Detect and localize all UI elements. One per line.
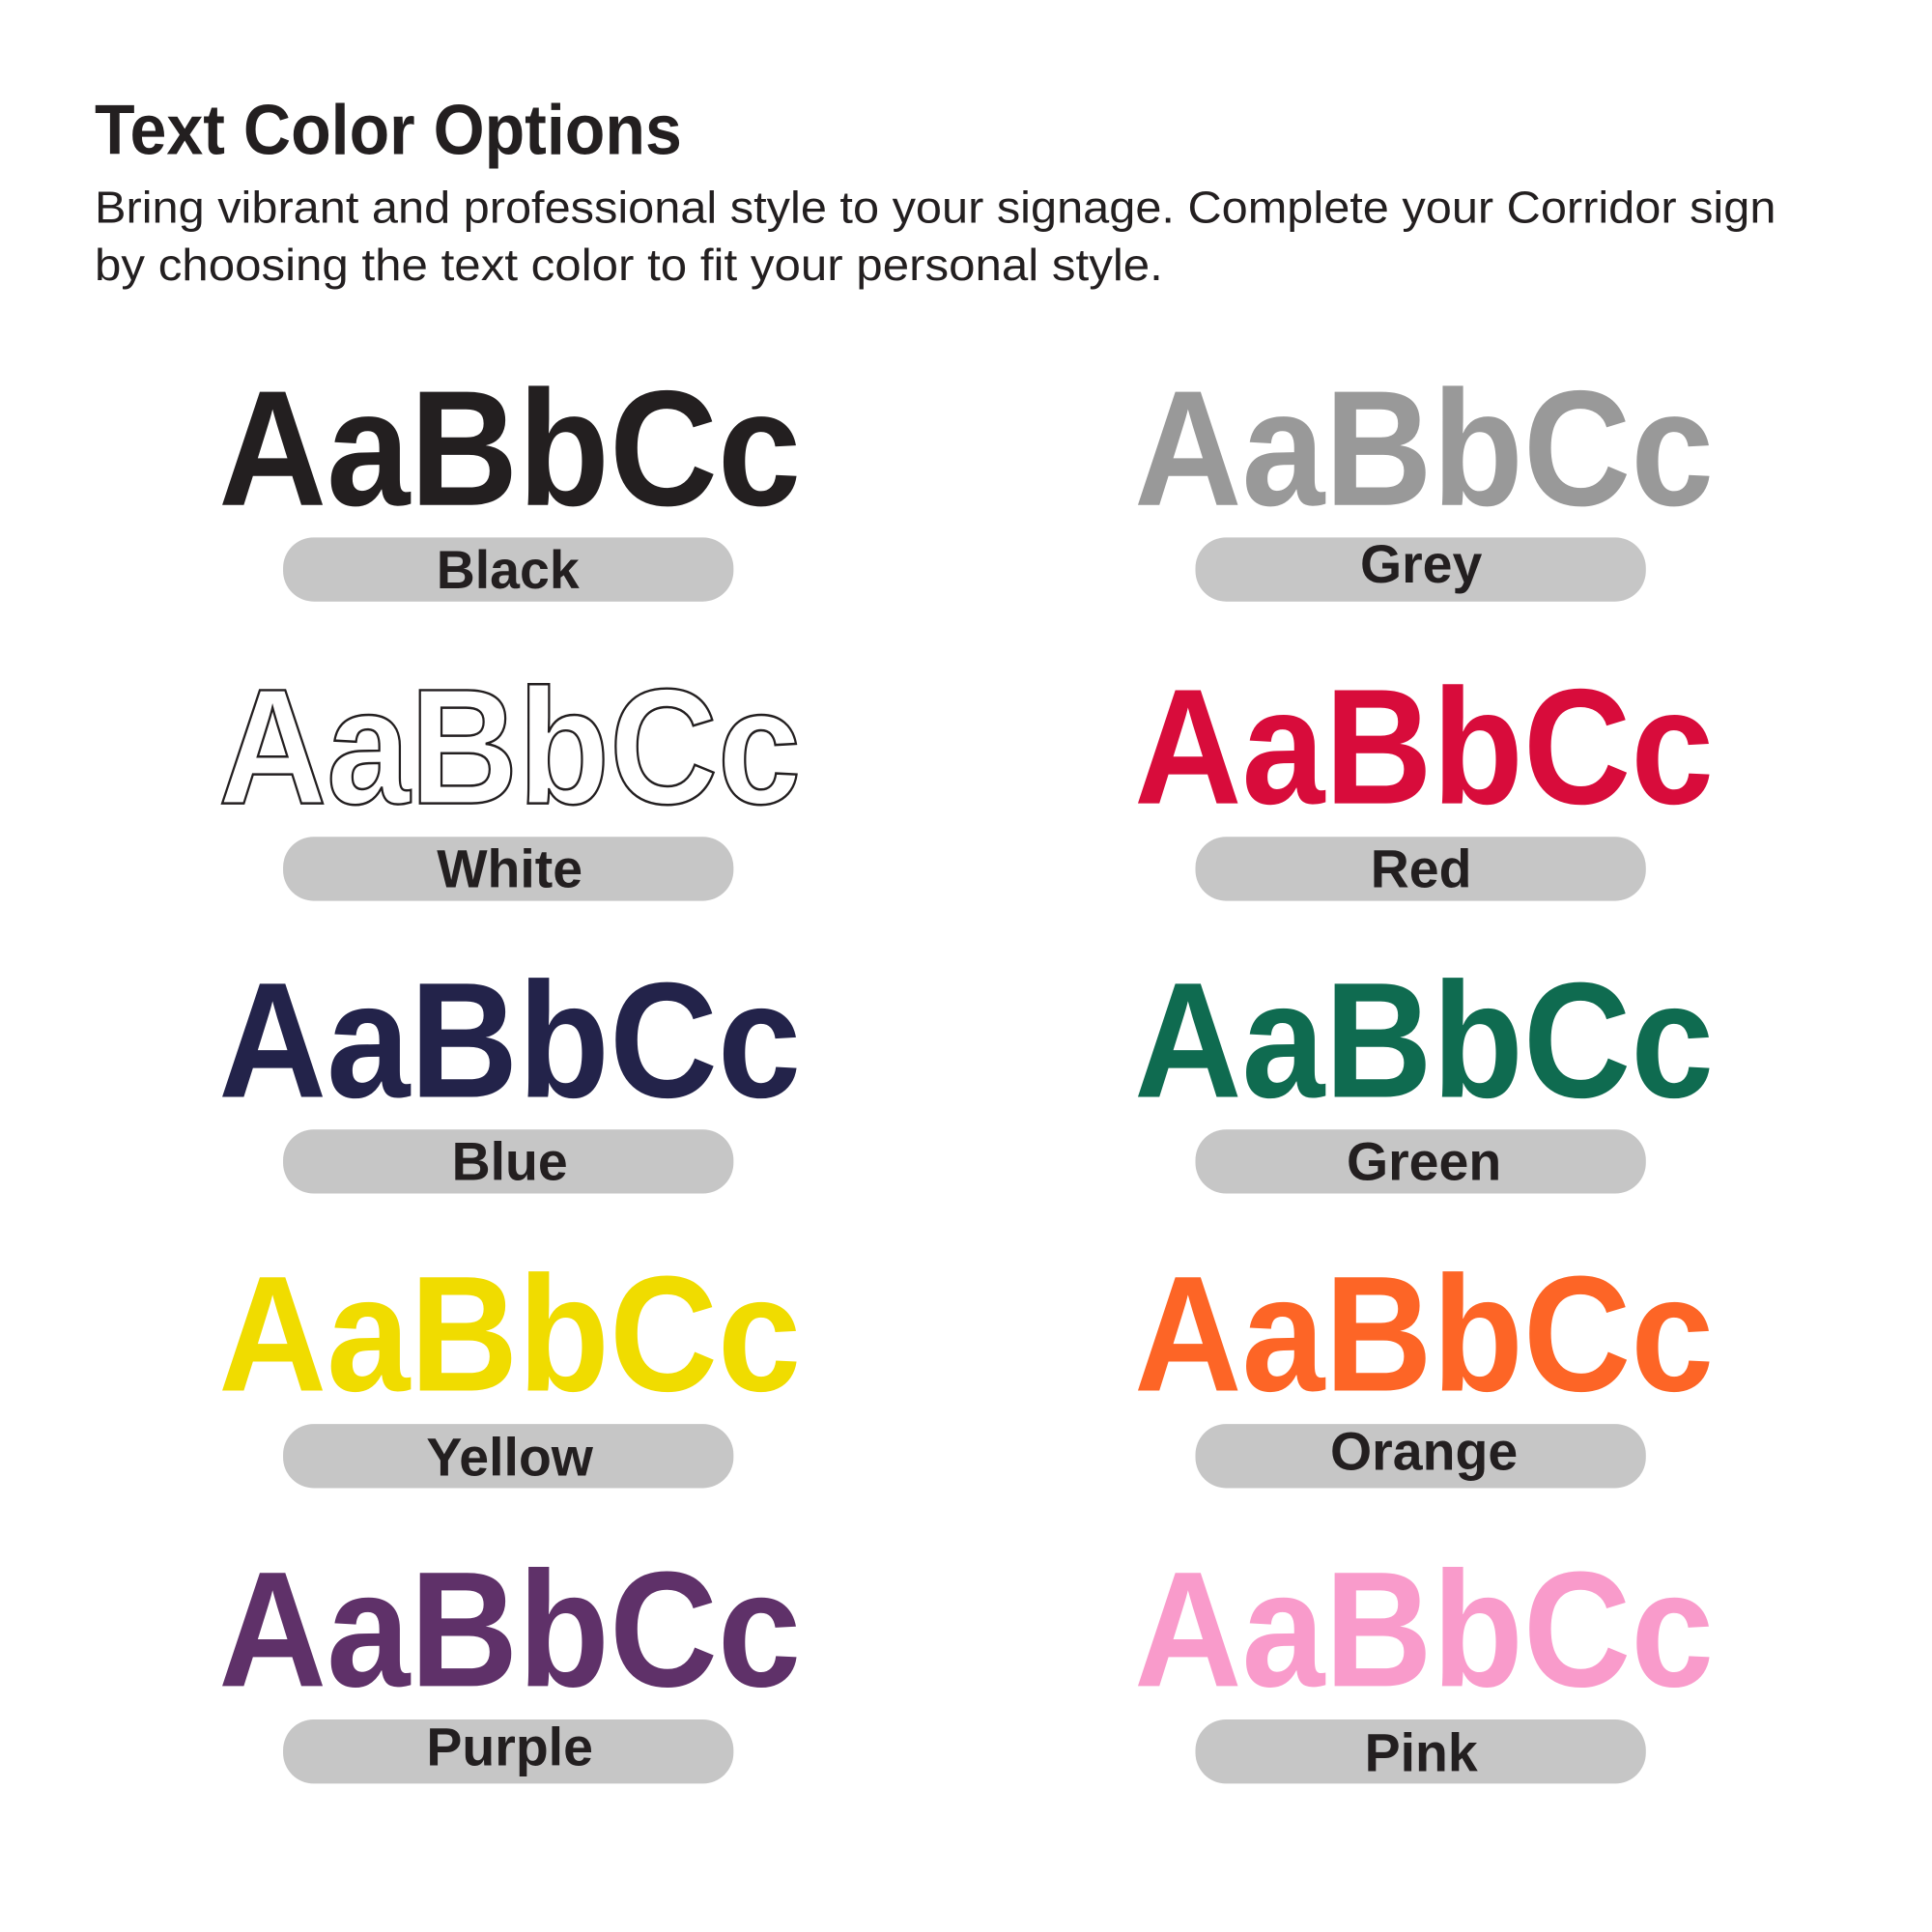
swatch: White: AaBbCc [218, 656, 801, 839]
swatch: Yellow: Yellow [426, 1428, 594, 1488]
swatch: Yellow [218, 1242, 801, 1488]
swatch: Grey: Grey [1360, 534, 1482, 594]
swatch: Blue: AaBbCc [218, 950, 801, 1133]
swatch: Green: AaBbCc [1134, 950, 1714, 1133]
subtitle text block: Bring vibrant and professional style to your signage. Complete your Corridor sign [95, 183, 1776, 233]
subtitle text block [95, 183, 1776, 290]
swatch: Orange: Orange [1330, 1422, 1518, 1482]
swatch: Blue [218, 950, 801, 1194]
swatch: Red [1134, 656, 1714, 901]
swatch: Red: Red [1371, 839, 1472, 899]
swatch: Orange [1134, 1242, 1714, 1488]
swatch: Green: Green [1347, 1132, 1501, 1192]
swatch: White [218, 656, 801, 901]
swatch: Pink [1134, 1538, 1714, 1783]
swatch: Orange: AaBbCc [1134, 1242, 1714, 1426]
swatch: Green [1134, 950, 1714, 1194]
swatch: Purple: AaBbCc [218, 1538, 801, 1721]
swatch: White: White [437, 839, 582, 899]
swatch: Grey: AaBbCc [1134, 357, 1714, 541]
swatch: Purple [218, 1538, 801, 1783]
swatch: Black: AaBbCc [218, 357, 801, 541]
swatch: Grey [1134, 357, 1714, 602]
swatch: Black: Black [437, 540, 580, 600]
swatch: Pink: AaBbCc [1134, 1538, 1714, 1721]
swatch: Blue: Blue [452, 1132, 568, 1192]
swatch: Purple: Purple [426, 1718, 593, 1777]
swatch: Yellow: AaBbCc [218, 1242, 801, 1426]
swatch: Red: AaBbCc [1134, 656, 1714, 839]
subtitle text block: by choosing the text color to fit your personal style. [95, 240, 1163, 290]
swatch: Black [218, 357, 801, 602]
swatch: Pink: Pink [1365, 1722, 1478, 1782]
title: Text Color Options [95, 90, 682, 169]
